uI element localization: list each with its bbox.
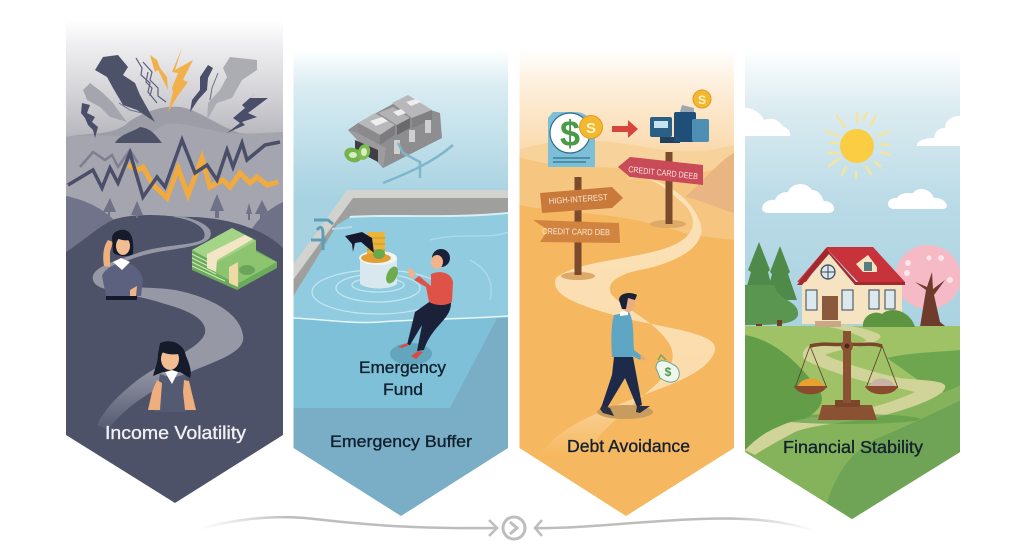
stressed woman bbox=[148, 341, 196, 412]
stormy sky background bbox=[66, 33, 283, 137]
clouds bbox=[745, 108, 960, 213]
garden path bbox=[745, 324, 945, 455]
grass hills bbox=[745, 326, 961, 530]
lower hills bbox=[66, 196, 283, 252]
storm clouds bbox=[83, 55, 257, 122]
debt document icon bbox=[548, 112, 602, 167]
money bag bbox=[656, 355, 679, 382]
desert dunes bbox=[519, 140, 734, 530]
gray volatility line bbox=[80, 150, 138, 167]
left arrow bbox=[200, 517, 497, 536]
winding road bbox=[93, 216, 243, 430]
trees bbox=[103, 194, 269, 220]
panel: debt avoidance bbox=[519, 50, 735, 530]
water surface bbox=[293, 213, 508, 322]
label: debt avoidance: Debt Avoidance bbox=[567, 436, 690, 456]
warm sky background bbox=[520, 58, 734, 152]
pipes bbox=[383, 143, 453, 183]
credit machine icon bbox=[650, 90, 711, 143]
pool rim bbox=[293, 190, 508, 297]
faucets bbox=[311, 220, 352, 250]
red arrow bbox=[612, 120, 638, 138]
debt document icon: S bbox=[586, 120, 596, 137]
money bag: $ bbox=[665, 365, 672, 379]
label: income volatility: Income Volatility bbox=[105, 423, 246, 443]
label: emergency fund: Emergency bbox=[359, 358, 447, 377]
cash stacks bbox=[192, 228, 277, 290]
left signpost bbox=[533, 177, 623, 280]
pool floor bbox=[294, 316, 508, 408]
pool lower wall bbox=[294, 318, 508, 516]
panel: financial stability bbox=[743, 50, 961, 530]
left signpost: HIGH-INTEREST bbox=[548, 192, 608, 206]
label: emergency fund bbox=[360, 361, 446, 396]
sun bbox=[826, 113, 890, 178]
dark volatility line bbox=[68, 140, 280, 197]
lightning bolts bbox=[81, 48, 268, 138]
sky background bbox=[293, 50, 509, 300]
sky background bbox=[745, 50, 961, 335]
label: emergency buffer: Emergency Buffer bbox=[330, 432, 472, 451]
person in water bbox=[390, 249, 453, 365]
winding path bbox=[538, 176, 715, 458]
panel: emergency buffer bbox=[293, 50, 509, 530]
right signpost: CREDIT CARD DEEB bbox=[628, 164, 699, 181]
coin container bbox=[345, 232, 400, 288]
pine trees bbox=[743, 242, 798, 332]
cash from machine bbox=[344, 144, 370, 162]
label: financial stability: Financial Stability bbox=[783, 437, 923, 457]
house bbox=[797, 247, 915, 327]
cherry blossom tree bbox=[895, 245, 961, 330]
label: emergency fund: Fund bbox=[383, 380, 423, 399]
ripples bbox=[293, 213, 508, 322]
yellow volatility line bbox=[128, 158, 278, 198]
panel: income volatility bbox=[66, 20, 283, 510]
balance scale bbox=[776, 331, 920, 424]
credit machine icon: S bbox=[698, 93, 706, 107]
left signpost: CREDIT CARD DEB bbox=[542, 226, 610, 237]
water pump machine bbox=[348, 95, 442, 168]
worried woman on phone bbox=[102, 230, 143, 300]
walking man bbox=[597, 293, 653, 419]
distant hills bbox=[66, 106, 283, 229]
dark foreground bbox=[66, 215, 283, 510]
bottom converging arrows bbox=[200, 517, 815, 539]
debt document icon: $ bbox=[560, 113, 580, 154]
right arrow bbox=[535, 518, 815, 536]
right signpost bbox=[618, 152, 703, 228]
center circle bbox=[503, 517, 525, 539]
